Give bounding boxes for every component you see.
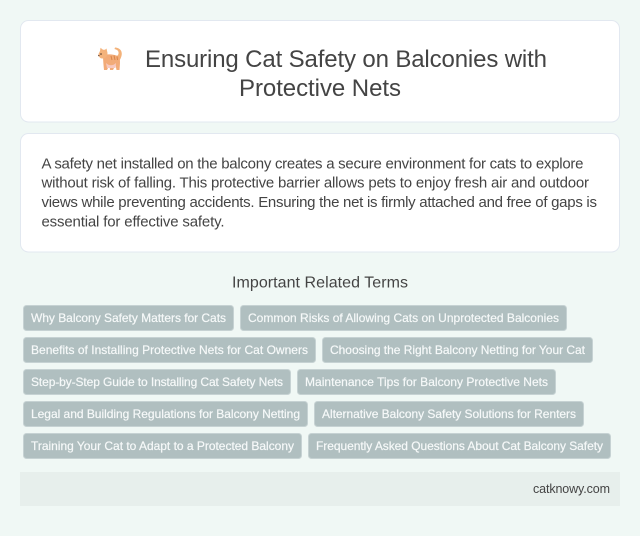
heading: related terms: Important Related Terms — [232, 275, 408, 292]
chip: benefits — [24, 338, 316, 362]
chip: legal — [24, 402, 308, 426]
chip: choosing netting — [322, 338, 592, 362]
text block: description: views while preventing accidents. Ensuring the net is firmly attached and free of gaps is — [42, 194, 597, 211]
text block: description: without risk of falling. This protective barrier allows pets to enjoy fresh air and outdoor — [40, 175, 589, 192]
chip: benefits: Benefits of Installing Protective Nets for Cat Owners — [31, 343, 308, 357]
chip: faq: Frequently Asked Questions About Cat Balcony Safety — [316, 439, 603, 453]
chip: training — [24, 434, 302, 458]
title: Ensuring Cat Safety on Balconies with — [145, 46, 547, 73]
chip: why balcony safety — [24, 306, 234, 330]
panel: description — [20, 134, 620, 252]
chip: step-by-step: Step-by-Step Guide to Installing Cat Safety Nets — [31, 375, 283, 389]
icon: cat — [98, 48, 122, 70]
chip: choosing netting: Choosing the Right Balcony Netting for Your Cat — [330, 343, 586, 357]
related terms chips — [24, 306, 610, 458]
chip: why balcony safety: Why Balcony Safety Matters for Cats — [31, 311, 226, 325]
chip: alternatives: Alternative Balcony Safety Solutions for Renters — [322, 407, 576, 421]
text block: description: essential for effective safety. — [42, 214, 224, 230]
chip: legal: Legal and Building Regulations for Balcony Netting — [31, 407, 300, 421]
title: Protective Nets — [239, 75, 401, 102]
chip: maintenance — [298, 370, 556, 394]
chip: step-by-step — [24, 370, 290, 394]
text block: description — [40, 155, 597, 230]
chip: common risks — [240, 306, 566, 330]
chip: maintenance: Maintenance Tips for Balcony Protective Nets — [305, 375, 548, 389]
text block: description: A safety net installed on the balcony creates a secure environment for cats to explore — [42, 155, 584, 172]
chip: common risks: Common Risks of Allowing Cats on Unprotected Balconies — [248, 311, 559, 325]
footer — [20, 472, 620, 506]
panel: title card — [20, 20, 620, 122]
chip: faq — [308, 434, 610, 458]
title — [145, 46, 547, 102]
footer: catknowy.com — [533, 482, 610, 496]
chip: alternatives — [314, 402, 584, 426]
chip: training: Training Your Cat to Adapt to a Protected Balcony — [31, 439, 294, 453]
